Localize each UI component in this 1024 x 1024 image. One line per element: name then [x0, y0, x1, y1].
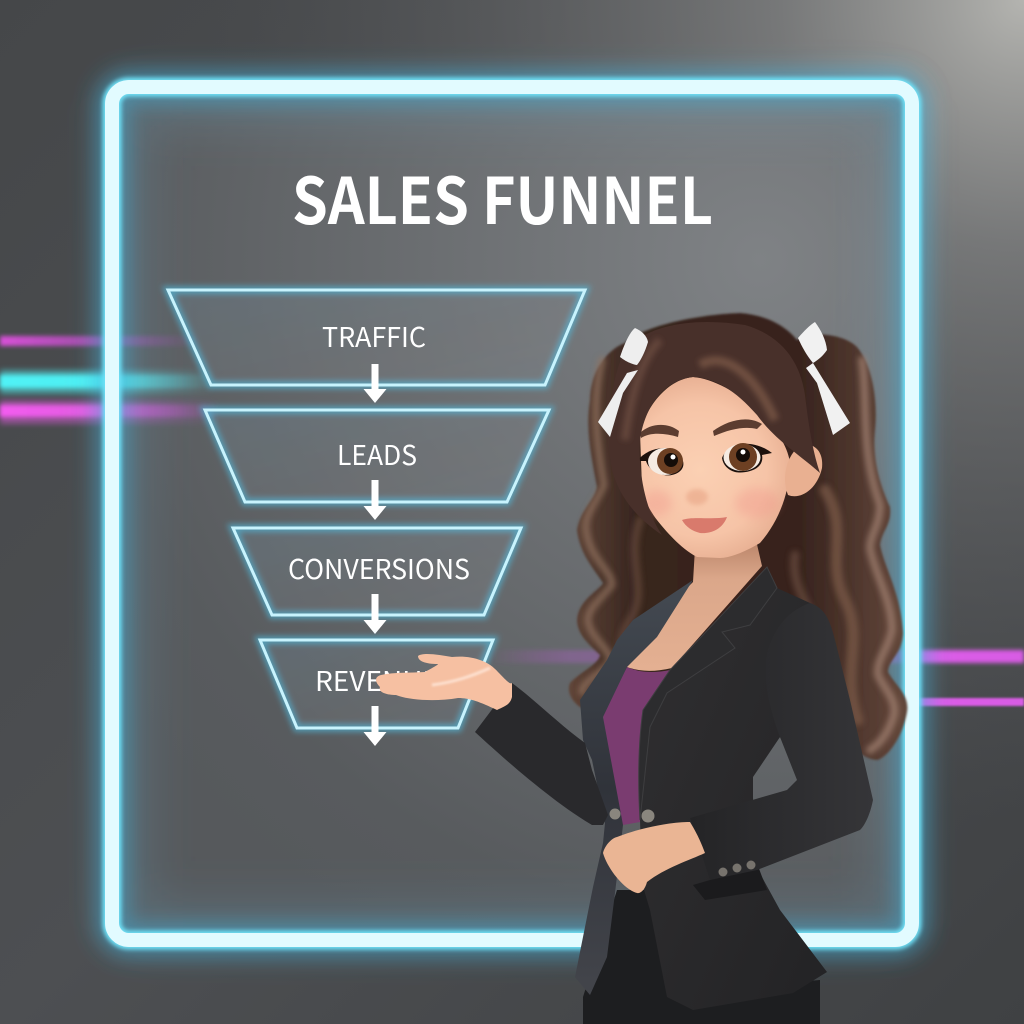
light streaks right — [490, 650, 1024, 706]
funnel stage: revenue: REVENUE — [315, 660, 439, 699]
hair strands — [582, 360, 894, 750]
blazer lapel — [639, 567, 777, 820]
funnel stage: traffic — [168, 290, 585, 385]
palm highlight — [432, 668, 490, 685]
blazer right panel — [640, 567, 827, 1010]
cheeks — [642, 490, 672, 516]
blazer left panel — [575, 580, 693, 995]
neck and chest — [627, 540, 762, 671]
front hair — [609, 322, 820, 535]
right eye — [722, 443, 772, 472]
title: SALES FUNNEL — [292, 151, 713, 243]
outer sleeve — [690, 603, 873, 880]
face — [637, 377, 822, 558]
left ribbon — [598, 328, 648, 437]
cuff buttons — [718, 860, 756, 876]
ear — [785, 445, 822, 496]
arrow: leads to conversions — [364, 480, 386, 520]
funnel — [168, 290, 585, 746]
pants — [583, 890, 820, 1024]
arrow: traffic to leads — [364, 364, 386, 403]
funnel stage: conversions: CONVERSIONS — [288, 548, 470, 587]
arrow: revenue output — [364, 706, 386, 746]
funnel stage: revenue — [260, 640, 493, 728]
front hair sheen — [625, 340, 775, 440]
neon frame — [112, 87, 912, 940]
back hair — [569, 313, 907, 760]
right ribbon — [798, 322, 850, 435]
nose — [686, 489, 708, 505]
mouth — [682, 517, 727, 533]
lower hand — [603, 822, 705, 893]
frame panel fill — [112, 87, 912, 940]
funnel stage: leads — [205, 410, 549, 502]
left eye — [637, 448, 683, 475]
pocket flap — [693, 866, 767, 900]
raised hand — [376, 654, 512, 710]
jacket buttons — [610, 808, 654, 822]
character — [376, 313, 907, 1024]
eyebrows — [640, 419, 762, 438]
light streaks left — [0, 336, 220, 424]
funnel stage: leads: LEADS — [337, 434, 417, 473]
funnel stage: traffic: TRAFFIC — [322, 316, 426, 355]
arrow: conversions to revenue — [364, 594, 386, 634]
funnel stage: conversions — [233, 528, 521, 615]
raised sleeve — [475, 683, 608, 825]
purple top — [603, 667, 670, 825]
